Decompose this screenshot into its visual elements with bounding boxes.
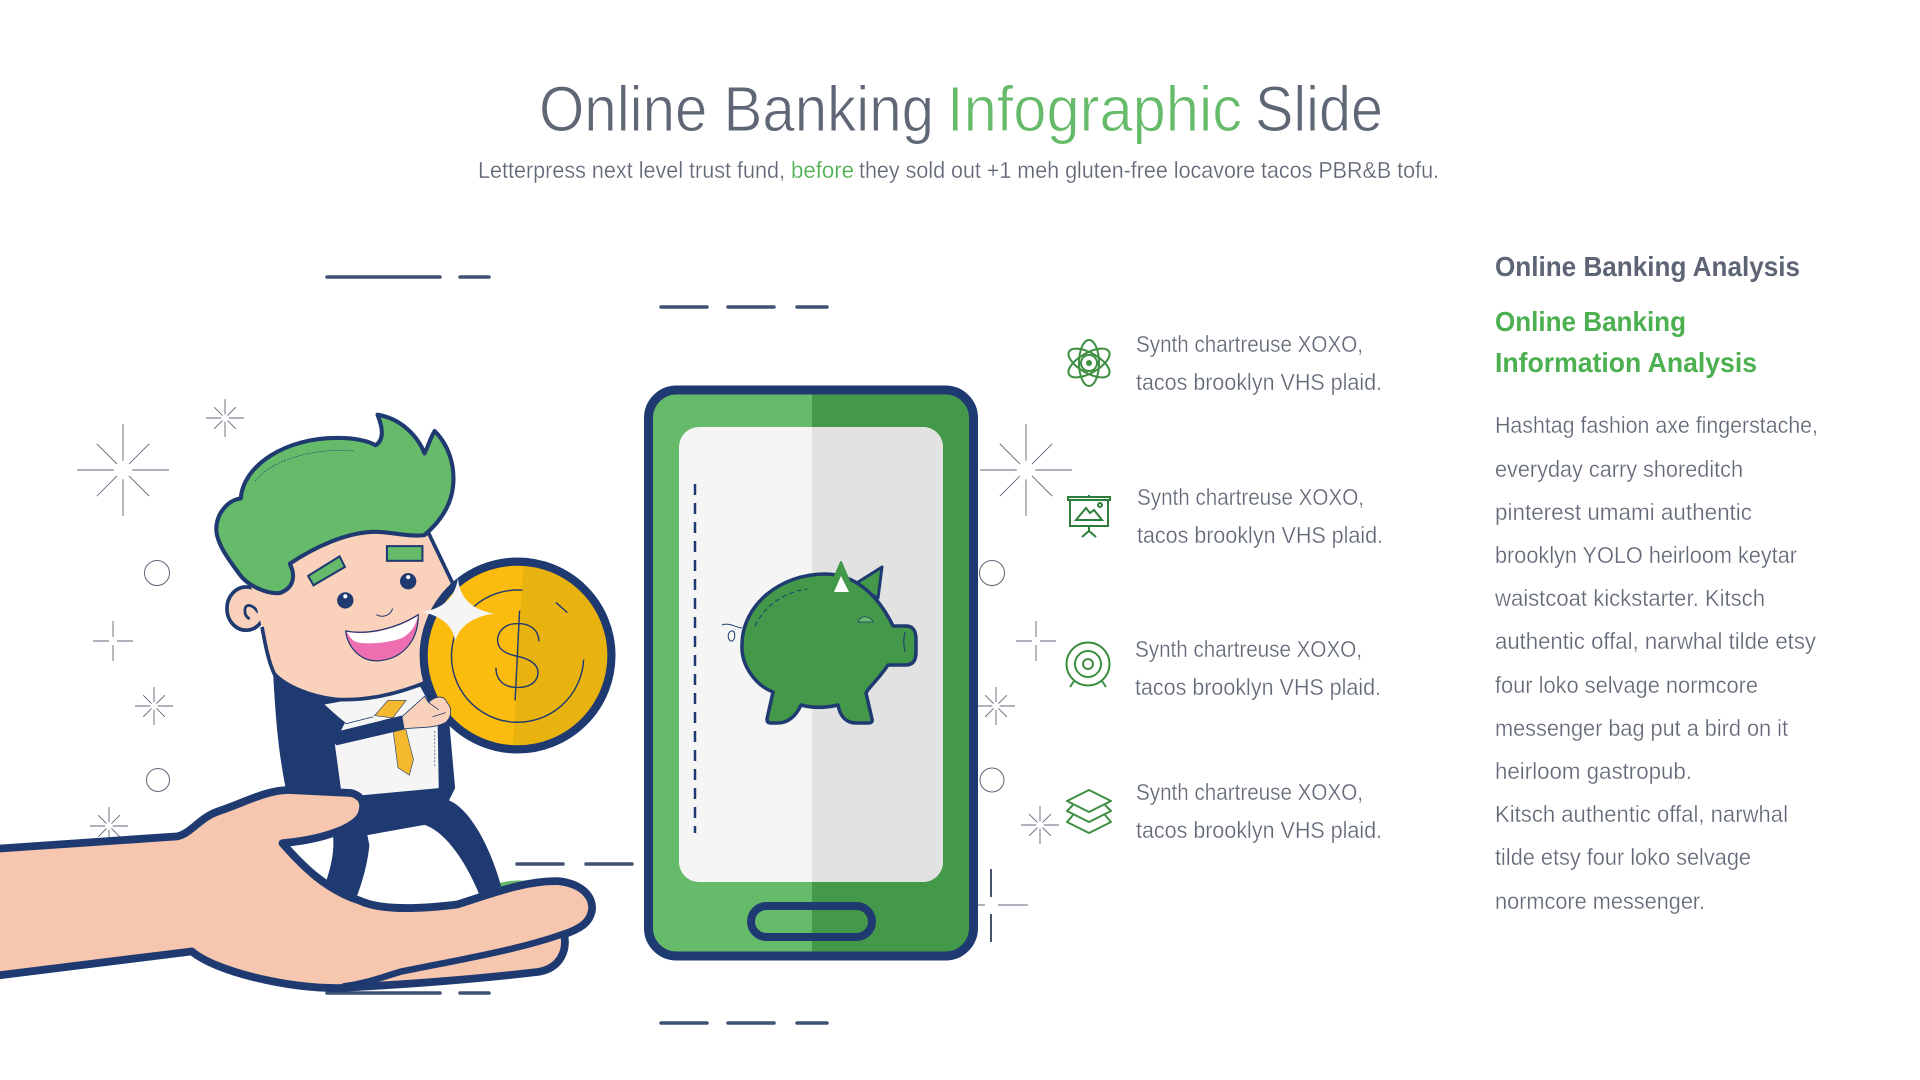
title: Slide [1255,73,1383,145]
subtitle: they sold out +1 meh gluten-free locavore tacos PBR&B tofu. [859,157,1439,183]
body paragraph: brooklyn YOLO heirloom keytar [1495,542,1797,568]
body paragraph: pinterest umami authentic [1495,499,1752,525]
feature row 2 [1068,484,1383,548]
subtitle: Letterpress next level trust fund, [478,157,785,183]
sparkle on coin [422,578,494,641]
right column [1494,251,1818,914]
feature text 4: tacos brooklyn VHS plaid. [1136,817,1382,843]
body paragraph: normcore messenger. [1495,888,1705,914]
body paragraph: heirloom gastropub. [1495,758,1692,784]
piggy bank [722,562,916,723]
title [539,73,1383,145]
feature text 2: tacos brooklyn VHS plaid. [1137,522,1383,548]
title: Online Banking [539,73,934,145]
feature text 2: Synth chartreuse XOXO, [1137,484,1364,510]
feature text 1 [1136,331,1382,395]
character: mouth [346,615,418,661]
dashed line [694,484,696,833]
icon: target [1066,642,1110,687]
subheading: information analysis: Information Analysis [1495,347,1757,378]
phone [648,390,974,956]
coin [424,562,612,750]
decorative dashes [327,277,827,1023]
feature text 3: tacos brooklyn VHS plaid. [1135,674,1381,700]
feature text 1: tacos brooklyn VHS plaid. [1136,369,1382,395]
character: suit [273,666,501,900]
home button [751,906,872,937]
left sparkles [77,399,244,845]
character: tie [375,700,413,775]
character: eyes [337,573,416,609]
body paragraph: Kitsch authentic offal, narwhal [1495,801,1788,827]
right sparkles [977,424,1072,942]
body paragraph [1494,412,1818,914]
character: hand on coin [402,696,451,729]
feature text 4: Synth chartreuse XOXO, [1136,779,1363,805]
phone screen [679,427,943,882]
icon: layers [1067,790,1111,833]
feature text 4 [1136,779,1382,843]
character: arm [322,716,405,745]
feature text 2 [1137,484,1383,548]
title: Infographic [947,73,1242,145]
body paragraph: waistcoat kickstarter. Kitsch [1494,585,1765,611]
subtitle [478,157,1439,183]
icon: atom [1064,340,1114,386]
character: eyebrows [308,546,422,585]
character: shirt [324,687,439,797]
feature row 4 [1067,779,1382,843]
phone body [648,390,974,956]
body paragraph: Hashtag fashion axe fingerstache, [1495,412,1818,438]
feature row 3 [1066,636,1381,700]
character: nose [376,609,393,616]
body paragraph: tilde etsy four loko selvage [1495,844,1751,870]
body paragraph: everyday carry shoreditch [1495,456,1743,482]
subheading: information analysis [1495,306,1757,378]
large hand [0,790,592,988]
character: hair [216,415,453,593]
subtitle: before [791,157,854,183]
feature text 3 [1135,636,1381,700]
subheading: information analysis: Online Banking [1495,306,1686,337]
feature text 3: Synth chartreuse XOXO, [1135,636,1362,662]
character and hand illustration [0,415,612,988]
character: ear [227,587,265,630]
icon: presentation board [1068,495,1110,537]
character: shoe [478,881,531,900]
feature row 1 [1064,331,1382,395]
body paragraph: authentic offal, narwhal tilde etsy [1495,628,1816,654]
feature text 1: Synth chartreuse XOXO, [1136,331,1363,357]
heading: analysis: Online Banking Analysis [1495,251,1800,282]
body paragraph: four loko selvage normcore [1495,672,1758,698]
character: face [245,519,455,700]
body paragraph: messenger bag put a bird on it [1495,715,1789,741]
